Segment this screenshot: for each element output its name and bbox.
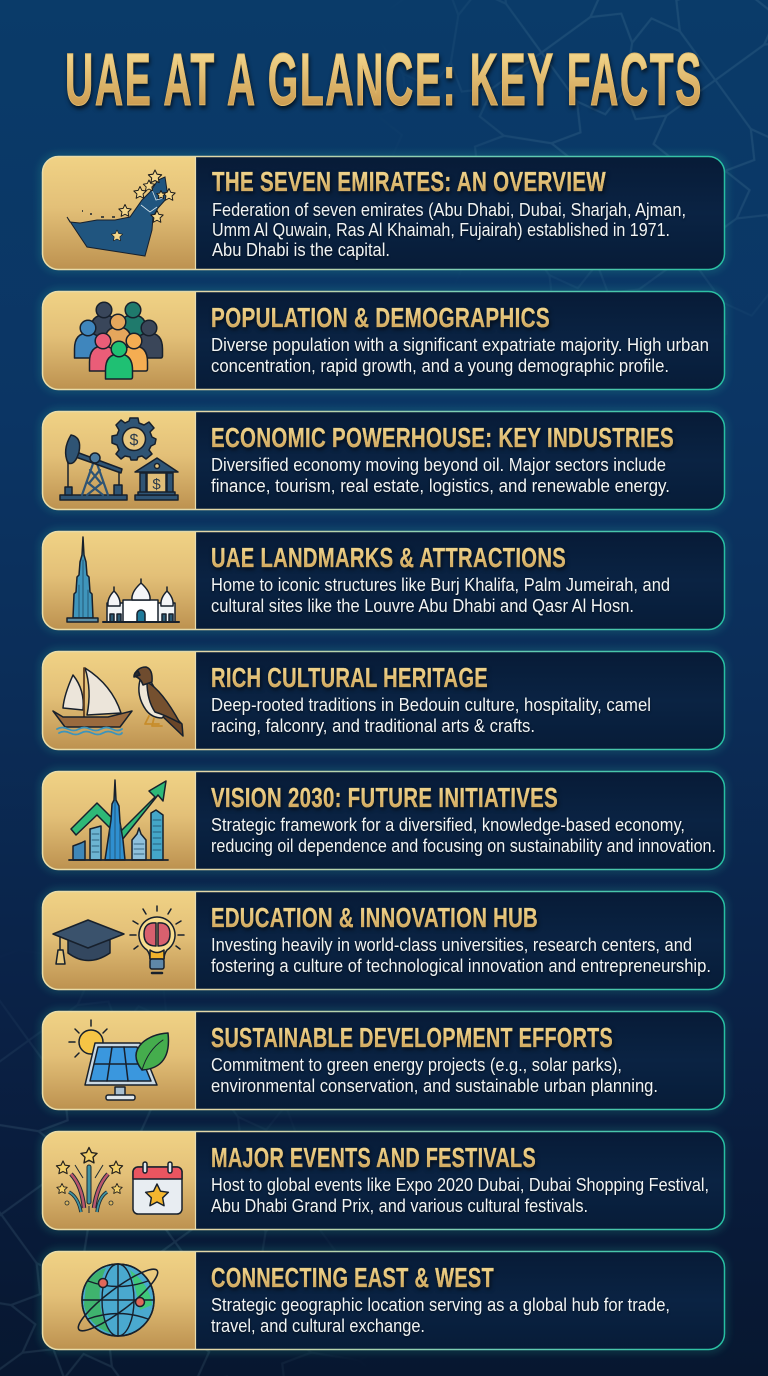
- panel: sustainability: [42, 1011, 725, 1110]
- panel: east and west: [42, 1251, 725, 1350]
- body text: travel, and cultural exchange.: [211, 1316, 425, 1336]
- heading: SUSTAINABLE DEVELOPMENT EFFORTS: [211, 1022, 613, 1053]
- body text: [211, 335, 709, 376]
- icon: oil pump, gear and bank: $: [130, 432, 139, 449]
- panel: population: [42, 291, 725, 390]
- body text: [211, 695, 651, 736]
- body text: [211, 455, 670, 496]
- body text: Diverse population with a significant expatriate majority. High urban: [211, 335, 709, 355]
- panel: cultural heritage: [42, 651, 725, 750]
- body text: finance, tourism, real estate, logistics, and renewable energy.: [211, 476, 670, 496]
- body text: Abu Dhabi is the capital.: [212, 240, 390, 260]
- body text: Commitment to green energy projects (e.g., solar parks),: [211, 1055, 622, 1075]
- heading: RICH CULTURAL HERITAGE: [211, 662, 488, 693]
- panel: education: [42, 891, 725, 990]
- body text: fostering a culture of technological innovation and entrepreneurship.: [211, 956, 711, 976]
- body text: Deep-rooted traditions in Bedouin culture, hospitality, camel: [211, 695, 651, 715]
- heading: THE SEVEN EMIRATES: AN OVERVIEW: [212, 166, 606, 197]
- body text: Investing heavily in world-class universities, research centers, and: [211, 935, 692, 955]
- body text: Abu Dhabi Grand Prix, and various cultural festivals.: [211, 1196, 588, 1216]
- body text: [211, 1055, 658, 1096]
- icon: oil pump, gear and bank: $: [152, 476, 161, 493]
- body text: racing, falconry, and traditional arts & crafts.: [211, 716, 535, 736]
- icon: growth arrow and skyline: [69, 780, 168, 860]
- icon: oil pump, gear and bank: [60, 418, 178, 500]
- panel: economy: [42, 411, 725, 510]
- body text: Host to global events like Expo 2020 Dubai, Dubai Shopping Festival,: [211, 1175, 709, 1195]
- body text: Federation of seven emirates (Abu Dhabi, Dubai, Sharjah, Ajman,: [212, 200, 686, 220]
- heading: EDUCATION & INNOVATION HUB: [211, 902, 538, 933]
- panel: vision 2030: [42, 771, 725, 870]
- icon: Burj Khalifa and mosque: [67, 537, 179, 622]
- icon: sun, solar panel and leaf: [69, 1020, 168, 1100]
- body text: Umm Al Quwain, Ras Al Khaimah, Fujairah) established in 1971.: [212, 220, 670, 240]
- panel: the seven emirates: [42, 156, 725, 270]
- body text: [211, 935, 711, 976]
- heading: UAE LANDMARKS & ATTRACTIONS: [211, 542, 566, 573]
- body text: Diversified economy moving beyond oil. Major sectors include: [211, 455, 666, 475]
- body text: [211, 1295, 670, 1336]
- body text: Strategic geographic location serving as a global hub for trade,: [211, 1295, 670, 1315]
- icon: fireworks: [56, 1148, 123, 1213]
- icon: calendar with star: [133, 1162, 182, 1214]
- body text: [211, 815, 716, 856]
- heading: VISION 2030: FUTURE INITIATIVES: [211, 782, 558, 813]
- body text: [211, 575, 670, 616]
- panel: landmarks: [42, 531, 725, 630]
- panel: events: [42, 1131, 725, 1230]
- heading: POPULATION & DEMOGRAPHICS: [211, 302, 550, 333]
- body text: Home to iconic structures like Burj Khalifa, Palm Jumeirah, and: [211, 575, 670, 595]
- body text: [212, 200, 686, 260]
- icon: UAE map with stars: [67, 170, 175, 256]
- icon: group of people: [74, 302, 162, 379]
- icon: dhow boat: [53, 668, 132, 734]
- body text: [211, 1175, 709, 1216]
- icon: globe with orbit: [72, 1262, 164, 1338]
- body text: Strategic framework for a diversified, knowledge-based economy,: [211, 815, 685, 835]
- icon: falcon: [134, 667, 183, 736]
- body text: environmental conservation, and sustainable urban planning.: [211, 1076, 658, 1096]
- body text: concentration, rapid growth, and a young demographic profile.: [211, 356, 669, 376]
- icon: light bulb with brain: [130, 906, 184, 973]
- heading: CONNECTING EAST & WEST: [211, 1262, 494, 1293]
- body text: reducing oil dependence and focusing on sustainability and innovation.: [211, 836, 716, 856]
- body text: cultural sites like the Louvre Abu Dhabi and Qasr Al Hosn.: [211, 596, 634, 616]
- heading: MAJOR EVENTS AND FESTIVALS: [211, 1142, 536, 1173]
- icon: graduation cap: [53, 920, 124, 964]
